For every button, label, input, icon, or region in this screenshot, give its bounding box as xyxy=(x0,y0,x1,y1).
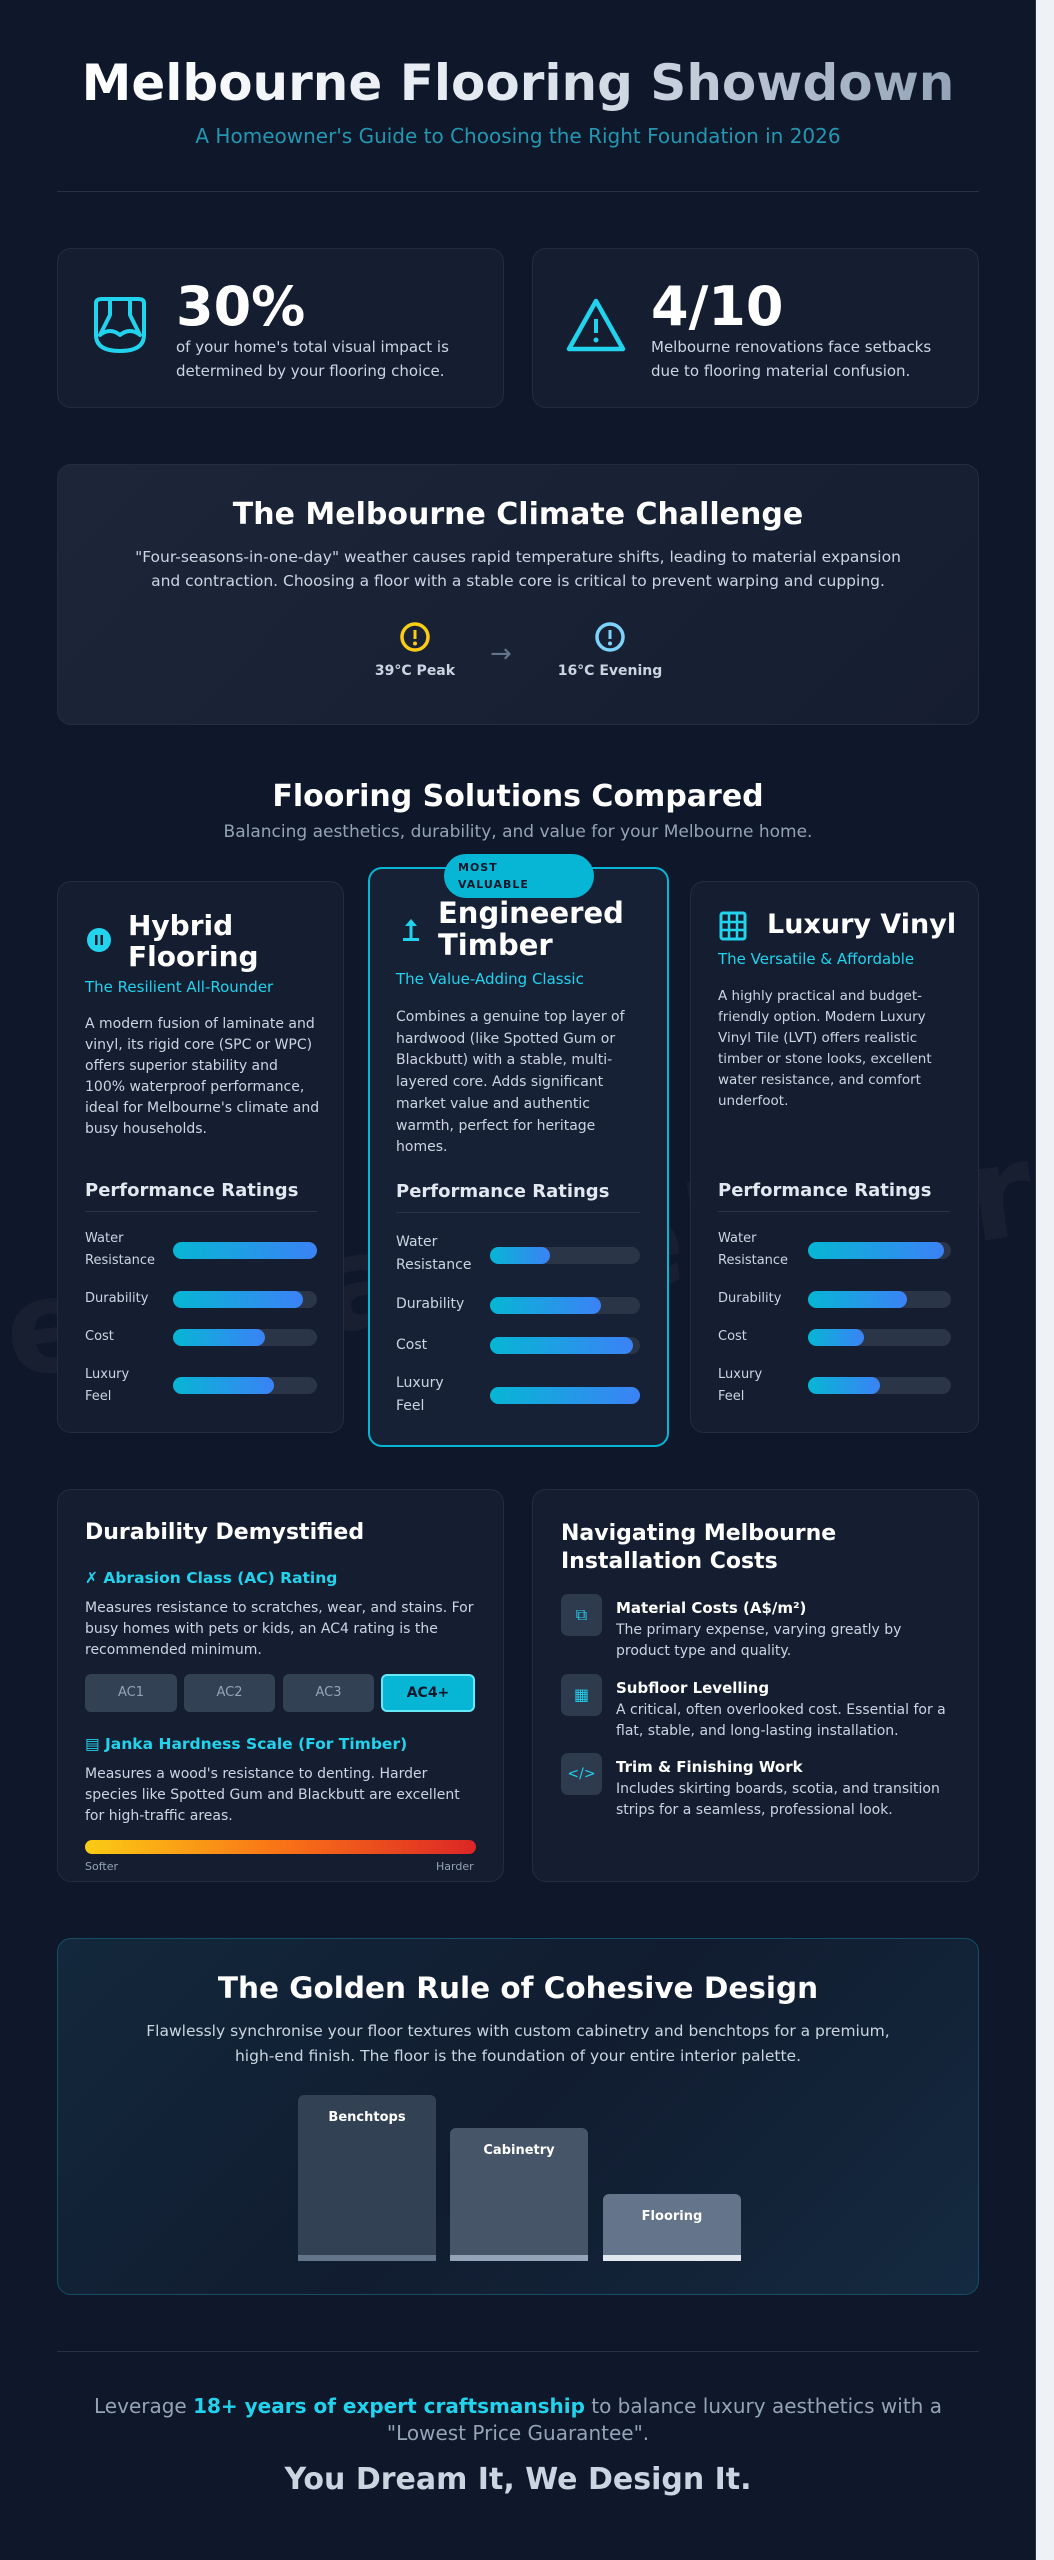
stat text: Melbourne renovations face setbacks due to flooring material confusion. xyxy=(651,338,931,380)
ratings: Resistance xyxy=(718,1253,788,1268)
tagline: The Versatile & Affordable xyxy=(718,950,914,968)
Janka text: Measures a wood's resistance to denting. Harder species like Spotted Gum and Blackbutt are excellent for high-traffic areas. xyxy=(85,1766,460,1824)
ratings xyxy=(396,1234,471,1273)
item: trim xyxy=(561,1753,940,1818)
panel: hybrid: Cost xyxy=(85,1329,114,1344)
panel: hybrid: Durability xyxy=(85,1291,148,1306)
AC heading: ✗ Abrasion Class (AC) Rating xyxy=(85,1569,337,1587)
item: subfloor: A critical, often overlooked cost. Essential for a flat, stable, and long-lasting installation. xyxy=(616,1702,946,1739)
title xyxy=(128,909,259,973)
tagline: You Dream It, We Design It. xyxy=(284,2462,752,2497)
stat card: 4/10 xyxy=(532,248,979,408)
panel: luxury vinyl: Cost xyxy=(718,1329,747,1344)
item: material: ⧉ xyxy=(576,1605,587,1624)
item: subfloor: ▦ xyxy=(574,1685,589,1704)
icon: hot xyxy=(375,622,456,679)
arrow: → xyxy=(490,639,512,669)
item: subfloor xyxy=(561,1674,946,1739)
chart: layers: Cabinetry xyxy=(483,2143,555,2158)
icon: cool: 16°C Evening xyxy=(558,663,662,679)
item: subfloor: Subfloor Levelling xyxy=(616,1679,769,1697)
AC scale: AC2 xyxy=(216,1685,242,1700)
chart: layers xyxy=(298,2095,741,2261)
panel: golden rule xyxy=(57,1938,979,2295)
item: material: Material Costs (A$/m²) xyxy=(616,1599,806,1617)
title xyxy=(438,896,624,962)
description: A highly practical and budget-friendly option. Modern Luxury Vinyl Tile (LVT) offers realistic timber or stone looks, excellent water resistance, and comfort underfoot. xyxy=(718,988,932,1109)
ratings: Resistance xyxy=(396,1257,471,1273)
stat card: 30% xyxy=(57,248,504,408)
subtitle: A Homeowner's Guide to Choosing the Right Foundation in 2026 xyxy=(195,124,841,148)
badge xyxy=(444,854,594,898)
panel: engineered timber xyxy=(368,867,669,1447)
panel: installation costs xyxy=(532,1489,979,1882)
item: trim: </> xyxy=(567,1766,596,1782)
description: Combines a genuine top layer of hardwood (like Spotted Gum or Blackbutt) with a stable, multi-layered core. Adds significant market value and authentic warmth, perfect for heritage homes. xyxy=(396,1009,625,1155)
description: A modern fusion of laminate and vinyl, its rigid core (SPC or WPC) offers superior stability and 100% waterproof performance, ideal for Melbourne's climate and busy households. xyxy=(85,1016,319,1137)
AC text: Measures resistance to scratches, wear, and stains. For busy homes with pets or kids, an AC4 rating is the recommended minimum. xyxy=(85,1600,473,1658)
panel: luxury vinyl: Feel xyxy=(718,1389,744,1404)
ratings xyxy=(85,1231,155,1268)
icon: hot: 39°C Peak xyxy=(375,663,455,679)
item: material xyxy=(561,1594,901,1659)
stat text: of your home's total visual impact is determined by your flooring choice. xyxy=(176,338,449,380)
icon xyxy=(403,919,419,941)
title: Engineered xyxy=(438,896,624,930)
badge: VALUABLE xyxy=(458,878,529,891)
ratings: Water xyxy=(396,1234,437,1250)
icon: vase xyxy=(94,297,146,353)
ratings: Water xyxy=(85,1231,123,1246)
item: trim: Includes skirting boards, scotia, and transition strips for a seamless, professional look. xyxy=(616,1781,940,1818)
ratings heading: Performance Ratings xyxy=(718,1180,931,1201)
AC scale: AC3 xyxy=(315,1685,342,1700)
heading: The Golden Rule of Cohesive Design xyxy=(218,1971,818,2005)
panel: hybrid: Luxury xyxy=(85,1367,129,1382)
text: Flawlessly synchronise your floor textures with custom cabinetry and benchtops for a premium, high-end finish. The floor is the foundation of your entire interior palette. xyxy=(146,2022,890,2065)
panel: luxury vinyl xyxy=(690,881,979,1433)
panel: hybrid: Feel xyxy=(85,1389,111,1404)
title: Luxury Vinyl xyxy=(767,909,956,940)
badge: MOST xyxy=(458,861,498,874)
panel: durability: Harder xyxy=(436,1860,474,1873)
panel: engineered timber: Durability xyxy=(396,1296,464,1312)
ratings heading: Performance Ratings xyxy=(85,1180,298,1201)
item: material: The primary expense, varying greatly by product type and quality. xyxy=(616,1622,901,1659)
Janka heading: ▤ Janka Hardness Scale (For Timber) xyxy=(85,1735,407,1753)
ratings: Resistance xyxy=(85,1253,155,1268)
chart: layers: Flooring xyxy=(642,2209,702,2224)
stat number: 30% xyxy=(176,275,305,338)
chart: layers: Benchtops xyxy=(328,2110,406,2125)
panel: durability xyxy=(57,1489,504,1882)
heading: Durability Demystified xyxy=(85,1520,364,1545)
title: Melbourne Flooring Showdown xyxy=(82,54,954,112)
item: trim: Trim & Finishing Work xyxy=(616,1758,803,1776)
heading: flooring solutions: Flooring Solutions Compared xyxy=(272,779,764,814)
icon: grid xyxy=(720,912,746,940)
panel: hybrid xyxy=(57,881,344,1433)
footer text: Leverage 18+ years of expert craftsmanship to balance luxury aesthetics with a "Lowest Price Guarantee". xyxy=(94,2394,942,2445)
tagline: The Resilient All-Rounder xyxy=(85,978,273,996)
title: Hybrid xyxy=(128,909,233,942)
panel: luxury vinyl: Luxury xyxy=(718,1367,762,1382)
ratings heading: Performance Ratings xyxy=(396,1181,609,1202)
title: Flooring xyxy=(128,940,259,973)
heading: Installation Costs xyxy=(561,1549,778,1574)
panel: luxury vinyl: Durability xyxy=(718,1291,781,1306)
panel: engineered timber: Cost xyxy=(396,1337,427,1353)
icon: cool xyxy=(558,622,662,679)
AC scale xyxy=(85,1674,475,1712)
AC scale: AC4+ xyxy=(407,1685,449,1701)
hardness bar xyxy=(85,1840,476,1854)
panel: durability: Softer xyxy=(85,1860,118,1873)
heading: The Melbourne Climate Challenge xyxy=(233,497,803,532)
title: Timber xyxy=(438,928,553,962)
icon: warning xyxy=(566,298,626,352)
heading: Navigating Melbourne xyxy=(561,1521,836,1546)
tagline: The Value-Adding Classic xyxy=(396,970,584,988)
icon xyxy=(87,928,111,952)
subheading: Balancing aesthetics, durability, and value for your Melbourne home. xyxy=(224,822,812,842)
text: "Four-seasons-in-one-day" weather causes rapid temperature shifts, leading to material expansion and contraction. Choosing a floor with a stable core is critical to prevent warping and cupping. xyxy=(135,548,901,590)
stat number: 4/10 xyxy=(651,275,783,338)
ratings: Water xyxy=(718,1231,756,1246)
panel: engineered timber: Luxury xyxy=(396,1375,444,1391)
panel: engineered timber: Feel xyxy=(396,1398,424,1414)
ratings xyxy=(718,1231,788,1268)
AC scale: AC1 xyxy=(118,1685,144,1700)
panel: climate challenge xyxy=(57,464,979,725)
heading xyxy=(561,1521,836,1574)
